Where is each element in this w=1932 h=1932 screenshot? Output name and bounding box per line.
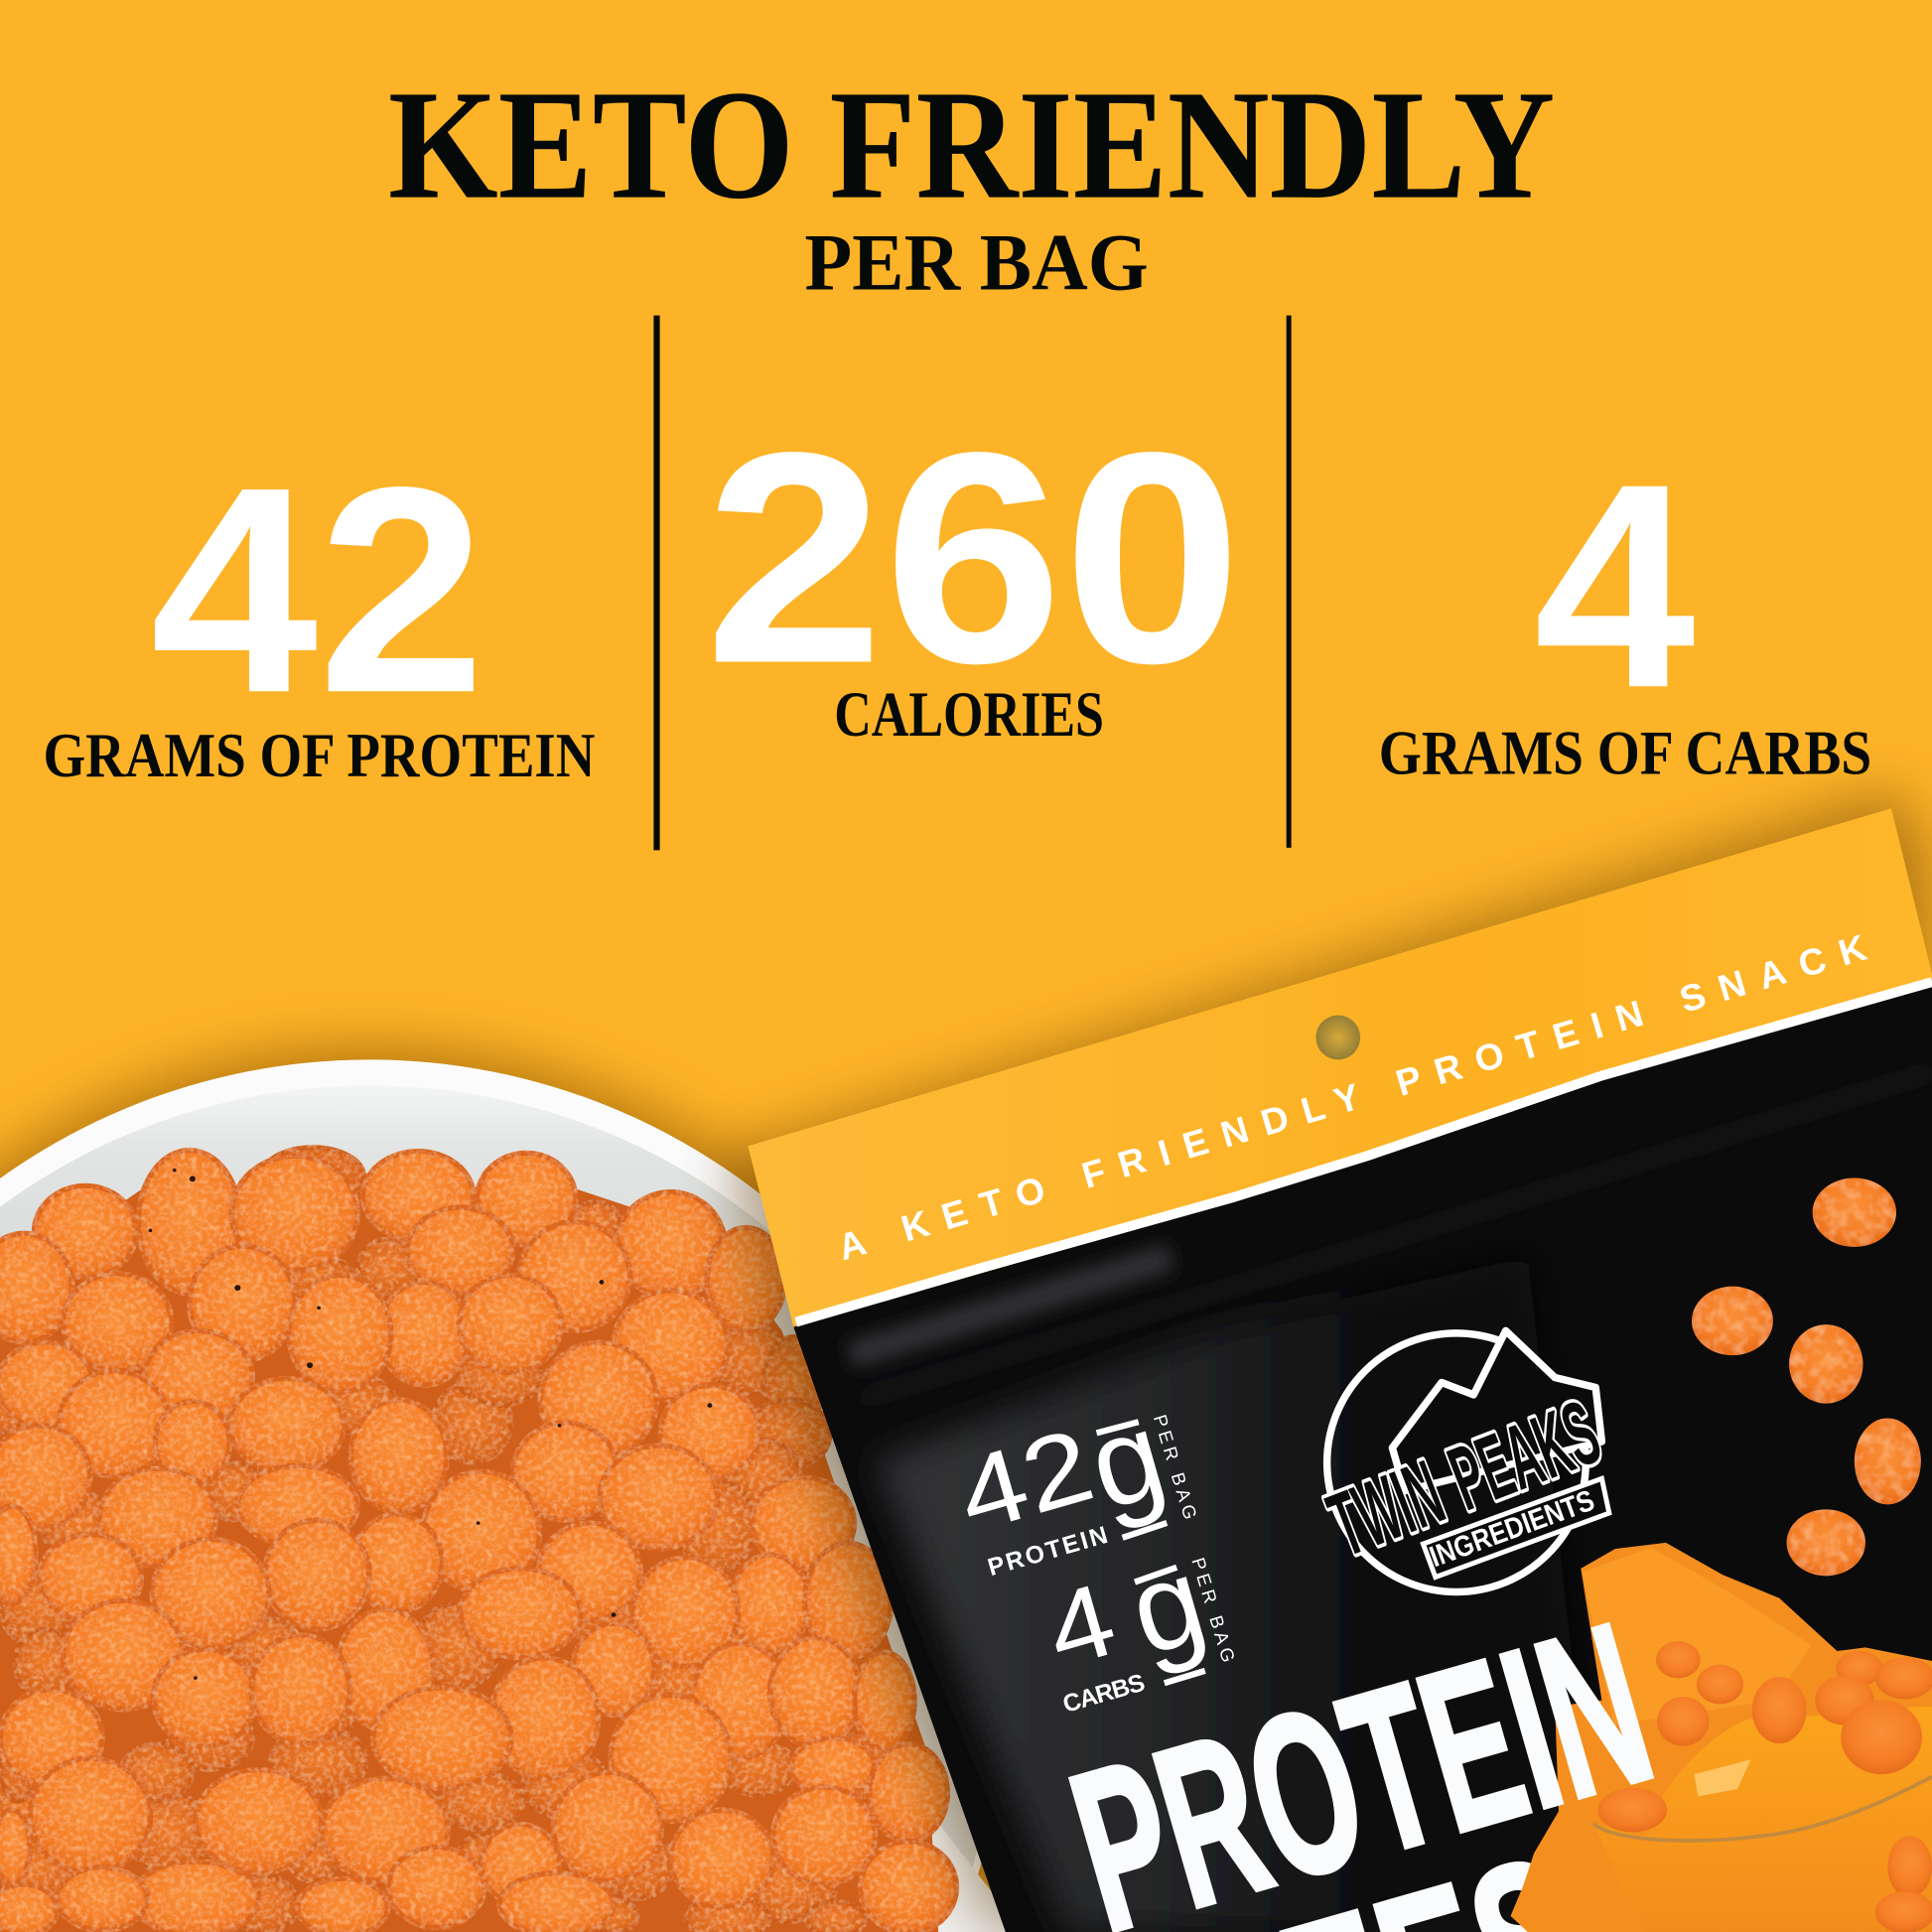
cheese wedge and crumbs bbox=[1511, 1543, 1932, 1932]
subtitle: PER BAG bbox=[804, 217, 1149, 308]
divider left bbox=[653, 316, 660, 850]
wedge highlight bbox=[1583, 1548, 1811, 1725]
logo subtext: INGREDIENTS bbox=[1426, 1484, 1598, 1574]
bag body bbox=[793, 983, 1932, 1932]
bag sheen panel bbox=[869, 1312, 1351, 1932]
puffs on cheese bbox=[1598, 1641, 1932, 1932]
protein: PROTEIN bbox=[985, 1522, 1111, 1582]
logo ring bbox=[1327, 1333, 1586, 1591]
seasoning specks bbox=[149, 1169, 712, 1680]
falling puffs bbox=[1692, 1177, 1921, 1576]
lower plate bbox=[863, 1725, 1023, 1932]
bars bbox=[1135, 1568, 1205, 1683]
carbs: CARBS bbox=[1060, 1670, 1148, 1719]
bag shadow bbox=[727, 788, 1932, 1932]
number 4: 4 bbox=[1534, 424, 1698, 749]
logo subtext band bbox=[1423, 1478, 1609, 1578]
stat block 42g bbox=[967, 1415, 1195, 1576]
tagline: A KETO FRIENDLY PROTEIN SNACK bbox=[833, 926, 1871, 1268]
bars bbox=[1097, 1422, 1167, 1538]
logo wordmark: TWIN PEAKS bbox=[1316, 1382, 1612, 1576]
per bag: PER BAG bbox=[1187, 1555, 1239, 1665]
g: g bbox=[1075, 1386, 1178, 1537]
zipper highlights bbox=[842, 1240, 1178, 1372]
glass rim bbox=[1593, 1777, 1932, 1841]
bag header band bbox=[748, 808, 1932, 1337]
bowl inner bbox=[0, 1085, 993, 1932]
white seam bbox=[796, 982, 1932, 1322]
label calories: CALORIES bbox=[834, 678, 1104, 750]
g: g bbox=[1116, 1531, 1219, 1682]
label protein: GRAMS OF PROTEIN bbox=[43, 721, 595, 790]
cheese balls bbox=[0, 1148, 956, 1932]
4: 4 bbox=[1035, 1562, 1128, 1691]
dip shine bbox=[1694, 1759, 1751, 1796]
title: KETO FRIENDLY bbox=[388, 60, 1555, 232]
bowl bbox=[0, 1059, 1004, 1932]
bowl of cheese balls bbox=[0, 1047, 1023, 1932]
dip bbox=[1593, 1707, 1932, 1932]
stat: calories bbox=[705, 390, 1242, 750]
number 260: 260 bbox=[705, 390, 1242, 726]
stat block 4g bbox=[1056, 1558, 1234, 1712]
number 42: 42 bbox=[150, 426, 485, 754]
stat: carbs bbox=[1379, 424, 1871, 787]
bag hang hole bbox=[1315, 1016, 1360, 1059]
stat: protein bbox=[43, 426, 595, 790]
mountain bbox=[1392, 1330, 1601, 1491]
divider right bbox=[1287, 316, 1292, 848]
product bag bbox=[748, 808, 1932, 1932]
42: 42 bbox=[945, 1408, 1105, 1555]
bowl shadow bbox=[0, 1047, 1017, 1932]
logo: twin peaks ingredients bbox=[1316, 1330, 1612, 1591]
label carbs: GRAMS OF CARBS bbox=[1379, 718, 1871, 787]
per bag: PER BAG bbox=[1150, 1412, 1201, 1522]
